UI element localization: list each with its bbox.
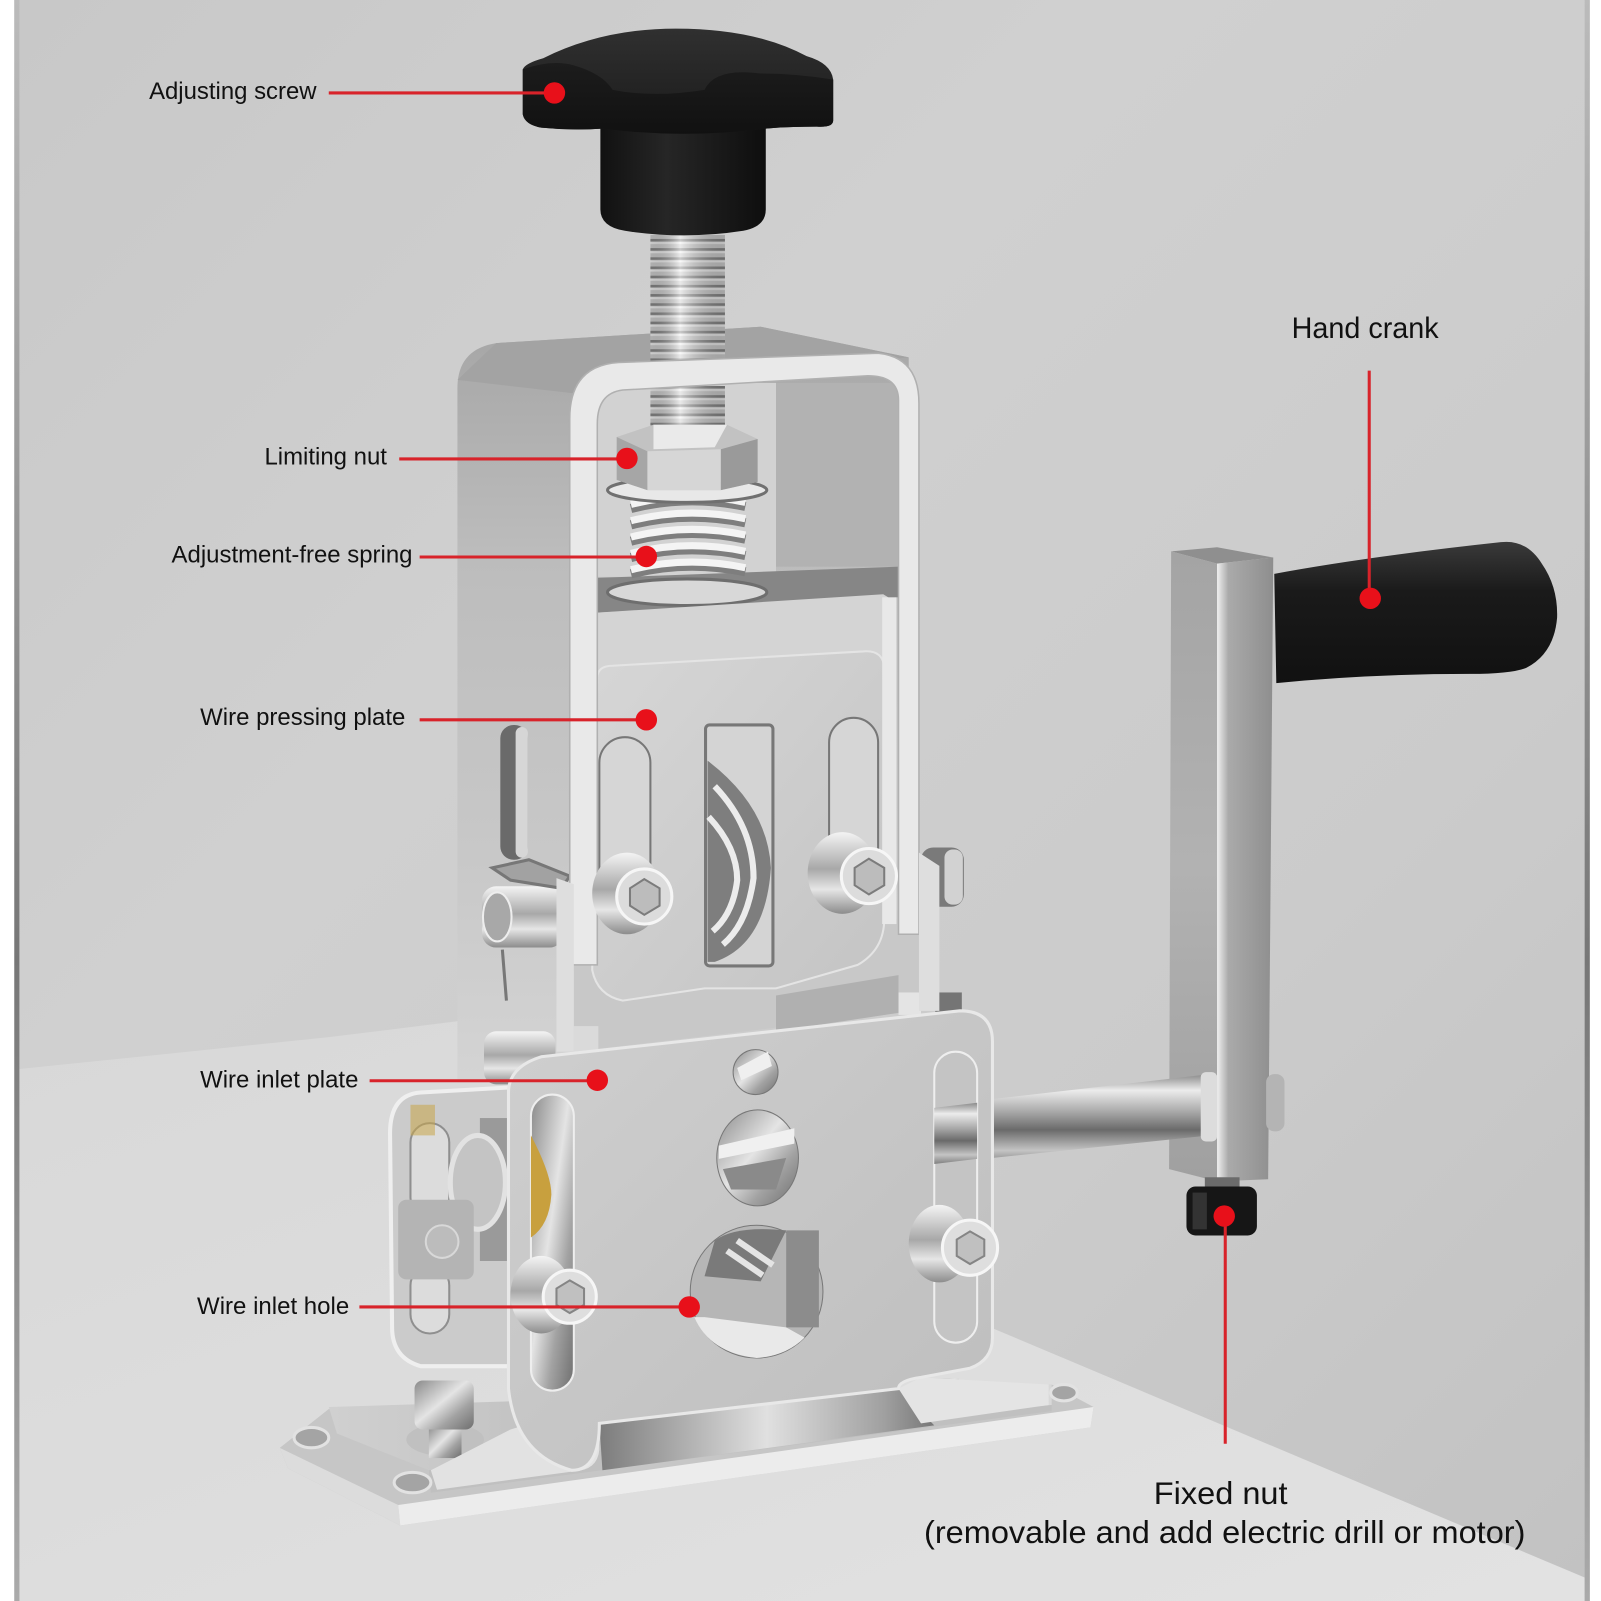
crank shaft (934, 1072, 1284, 1164)
hand crank black grip (1274, 542, 1557, 683)
limiting nut (617, 425, 758, 490)
slide bolts on press plate (592, 832, 896, 934)
small hole (733, 1050, 778, 1095)
plate slots (531, 1052, 977, 1391)
label: Wire pressing plate: Wire pressing plate (200, 704, 405, 731)
label: Wire pressing plate (200, 704, 657, 731)
wire pressing plate (592, 594, 896, 1001)
base plate (280, 1378, 1094, 1525)
label: Fixed nut: (removable and add electric drill or motor) (924, 1514, 1525, 1550)
medium hole (717, 1110, 798, 1206)
side screws on rear frame (482, 847, 964, 1084)
label: Adjustment-free spring (172, 542, 657, 569)
wire inlet hole (690, 1225, 823, 1358)
label: Adjusting screw: Adjusting screw (149, 78, 317, 105)
fixed nut (1186, 1177, 1257, 1235)
label: Wire inlet plate: Wire inlet plate (200, 1066, 358, 1093)
rear frame plate (457, 327, 919, 1082)
product: wire stripping machine (280, 29, 1557, 1525)
gold roller seen through slot (531, 1135, 551, 1238)
label: Adjustment-free spring: Adjustment-free spring (172, 542, 413, 569)
label: Wire inlet hole (197, 1293, 700, 1320)
label: Adjusting screw (149, 78, 565, 105)
rear bracket with gold roller (390, 1087, 521, 1366)
label: Fixed nut: Fixed nut (1154, 1475, 1288, 1511)
hand crank arm (1169, 547, 1273, 1181)
label: Limiting nut (264, 444, 638, 471)
label: Hand crank (1292, 312, 1439, 609)
label: Wire inlet plate (200, 1066, 608, 1093)
center window with blade (706, 725, 773, 966)
adjusting screw knob (523, 29, 833, 235)
front wire inlet plate (431, 1011, 1049, 1490)
lower guide block behind press plate (574, 909, 962, 1055)
label: Limiting nut: Limiting nut (264, 444, 387, 471)
label: Hand crank: Hand crank (1292, 312, 1439, 345)
label: Fixed nut (924, 1205, 1525, 1550)
plate bolts (511, 1205, 998, 1333)
spring (608, 478, 767, 605)
guide rails (556, 853, 939, 1052)
label: Wire inlet hole: Wire inlet hole (197, 1293, 349, 1320)
front U frame (570, 353, 919, 965)
threaded adjusting rod (650, 235, 725, 437)
